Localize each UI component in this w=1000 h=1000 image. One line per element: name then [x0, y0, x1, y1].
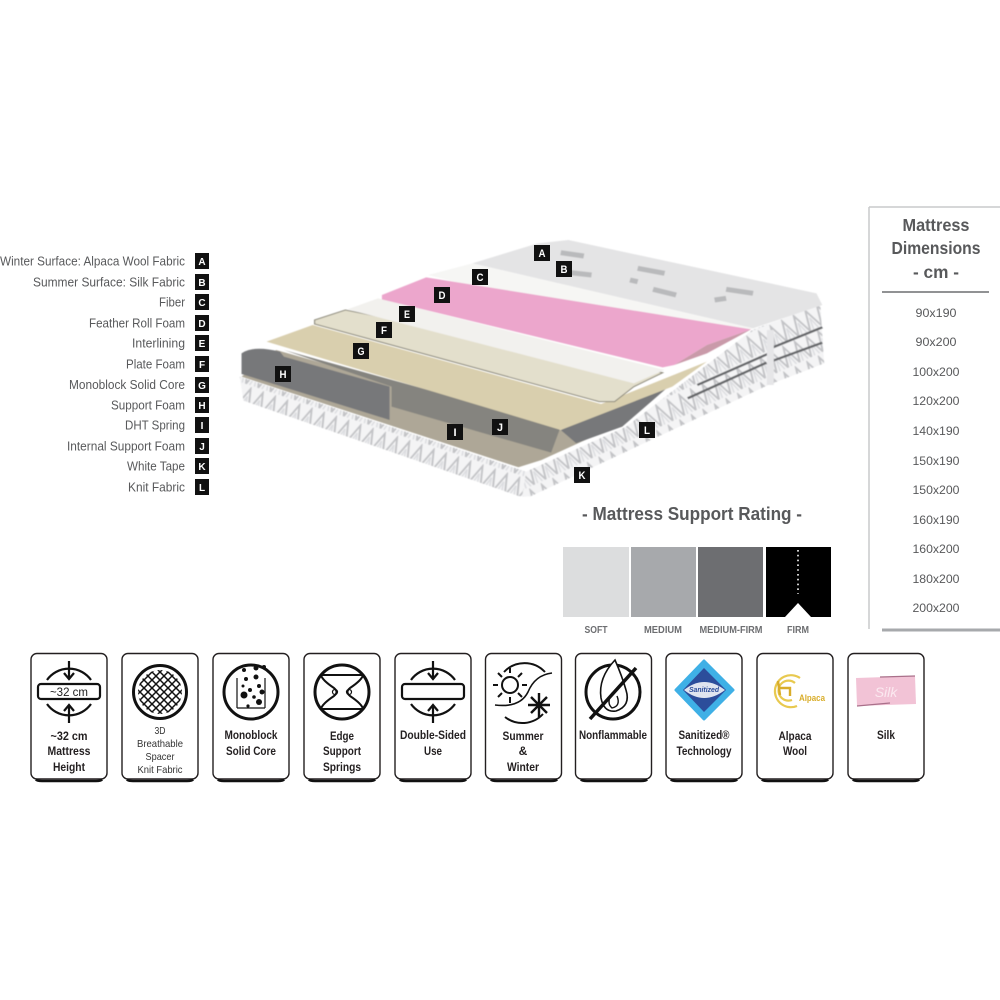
- layer badge E: E: [404, 309, 410, 321]
- card: edge support springs: [304, 654, 380, 781]
- card: mattress height: Mattress: [48, 744, 91, 758]
- legend row C: C: [198, 298, 206, 309]
- card: summer and winter: Winter: [507, 760, 539, 774]
- layer badge J: [492, 419, 508, 435]
- legend row C: Fiber: [159, 296, 185, 310]
- dimensions list: 90x190: [916, 306, 957, 320]
- dimensions list: 180x200: [912, 572, 960, 586]
- icon: double sided: [402, 661, 464, 723]
- card: sanitized technology: Sanitized®: [678, 728, 730, 742]
- card: 3D knit fabric: Breathable: [137, 738, 183, 750]
- card: edge support springs: Springs: [323, 760, 361, 774]
- dimensions heading: Mattress: [902, 215, 970, 235]
- card: mattress height: [31, 654, 107, 781]
- dimensions list: 150x200: [912, 483, 960, 497]
- icon: silk logo: Silk: [875, 684, 898, 700]
- swatch soft: [563, 547, 629, 636]
- legend row G: Monoblock Solid Core: [69, 378, 185, 392]
- legend row E: E: [199, 339, 206, 350]
- legend: mattress layers: [0, 253, 209, 495]
- card: 3D knit fabric: [122, 654, 198, 781]
- dimensions list: 200x200: [912, 601, 960, 615]
- icon: no flame: [586, 660, 640, 719]
- card: mattress height: ~32 cm: [50, 729, 88, 743]
- card: 3D knit fabric: 3D: [154, 725, 166, 737]
- card: double-sided use: Double-Sided: [400, 728, 466, 742]
- dimensions list: [912, 306, 960, 615]
- dimensions heading: Dimensions: [892, 238, 981, 258]
- legend row J: Internal Support Foam: [67, 440, 185, 454]
- layer badge L: [639, 422, 655, 438]
- legend row K: K: [198, 462, 206, 473]
- legend row H: Support Foam: [111, 398, 185, 412]
- heading: mattress support rating: - Mattress Support Rating -: [582, 504, 802, 524]
- card: silk: [848, 654, 924, 781]
- legend row E: Interlining: [132, 336, 185, 350]
- card: monoblock solid core: Solid Core: [226, 744, 276, 758]
- card: 3D knit fabric: Knit Fabric: [138, 764, 182, 776]
- icon: core with bubbles: [224, 665, 278, 719]
- layer badge I: I: [453, 427, 457, 439]
- layer badge G: [353, 343, 369, 359]
- layer badge A: A: [538, 248, 546, 260]
- layer badge D: [434, 287, 450, 303]
- layer badge G: G: [358, 346, 364, 358]
- card: summer and winter: [486, 654, 562, 781]
- legend row F: [126, 356, 209, 372]
- swatch soft: SOFT: [584, 624, 608, 636]
- dimensions list: 120x200: [912, 394, 960, 408]
- icon: sun and snowflake: [493, 663, 552, 723]
- swatch firm: FIRM: [787, 624, 809, 636]
- icon: knit mesh: [134, 666, 186, 718]
- support foam block: [242, 349, 390, 420]
- dimensions list: 100x200: [912, 365, 960, 379]
- legend row I: [125, 417, 209, 433]
- legend row L: L: [199, 483, 205, 494]
- swatch medium: MEDIUM: [644, 624, 682, 636]
- legend row E: [132, 335, 209, 351]
- feather roll foam layer: [382, 277, 751, 367]
- layer badge H: H: [280, 369, 287, 381]
- monoblock layer: [267, 325, 707, 430]
- internal support foam core: [284, 350, 561, 453]
- layer badge D: D: [438, 290, 446, 302]
- card: sanitized technology: Technology: [676, 744, 732, 758]
- interlining layer: [347, 298, 665, 383]
- card: summer and winter: &: [519, 744, 528, 758]
- card: alpaca wool: Wool: [783, 744, 807, 758]
- layer badge H: [275, 366, 291, 382]
- card: double-sided use: Use: [424, 744, 442, 758]
- mattress layer badges: [275, 245, 655, 483]
- legend row H: H: [198, 401, 206, 412]
- layer badge J: J: [497, 422, 503, 434]
- card: alpaca wool: [757, 654, 833, 781]
- layer badge E: [399, 306, 415, 322]
- layer badge F: F: [381, 325, 387, 337]
- dimensions list: 160x200: [912, 542, 960, 556]
- layer badge L: L: [644, 425, 650, 437]
- layer badge I: [447, 424, 463, 440]
- icon: alpaca logo: Alpaca: [799, 693, 826, 703]
- legend row I: DHT Spring: [125, 418, 185, 432]
- card: edge support springs: Support: [323, 744, 361, 758]
- card: sanitized technology: [666, 654, 742, 781]
- card: 3D knit fabric: Spacer: [146, 751, 175, 763]
- card: edge support springs: Edge: [330, 729, 354, 743]
- legend row D: Feather Roll Foam: [89, 316, 185, 330]
- card: nonflammable: [576, 654, 652, 781]
- swatch medium: [631, 547, 696, 636]
- legend row A: A: [198, 257, 206, 268]
- card: monoblock solid core: [213, 654, 289, 781]
- swatch medium-firm: [698, 547, 763, 636]
- card: monoblock solid core: Monoblock: [224, 728, 278, 742]
- layer badge B: B: [560, 264, 568, 276]
- layer badge A: [534, 245, 550, 261]
- legend row K: [127, 458, 209, 474]
- icon: spring: [315, 665, 369, 719]
- panel: feature icons: [31, 654, 924, 781]
- legend row L: [128, 479, 209, 495]
- icon: sanitized badge: Sanitized: [689, 685, 719, 694]
- dimensions list: 140x190: [912, 424, 960, 438]
- legend row K: White Tape: [127, 460, 185, 474]
- dimensions list: 160x190: [912, 513, 960, 527]
- layer badge C: C: [476, 272, 484, 284]
- legend row C: [159, 294, 209, 310]
- legend row L: Knit Fabric: [128, 480, 185, 494]
- legend row F: F: [199, 360, 205, 371]
- legend row B: Summer Surface: Silk Fabric: [33, 276, 185, 290]
- right side foam: [561, 370, 688, 443]
- dimensions list: 150x190: [912, 454, 960, 468]
- card: alpaca wool: Alpaca: [778, 729, 812, 743]
- mattress cutaway illustration: [240, 240, 824, 497]
- base inner surface: [242, 350, 615, 467]
- legend row A: Winter Surface: Alpaca Wool Fabric: [0, 254, 185, 268]
- plate foam layer: [315, 310, 663, 402]
- legend row F: Plate Foam: [126, 358, 185, 372]
- swatch medium-firm: MEDIUM-FIRM: [700, 624, 763, 636]
- panel: mattress dimensions: [869, 207, 1000, 630]
- layer badge F: [376, 322, 392, 338]
- legend row J: J: [199, 442, 205, 453]
- layer badge C: [472, 269, 488, 285]
- card: mattress height: Height: [53, 760, 85, 774]
- dimensions list: 90x200: [916, 335, 957, 349]
- top quilted surface: [472, 240, 822, 328]
- layer badge K: [574, 467, 590, 483]
- layer badge B: [556, 261, 572, 277]
- panel: support rating swatches: [563, 547, 831, 636]
- card: nonflammable: Nonflammable: [579, 728, 647, 742]
- icon: height: ~32 cm: [50, 687, 88, 699]
- legend row I: I: [201, 421, 204, 432]
- fiber layer: [428, 263, 753, 345]
- card: summer and winter: Summer: [502, 729, 544, 743]
- legend row D: D: [198, 319, 206, 330]
- legend row B: B: [198, 278, 206, 289]
- swatch firm: [766, 547, 831, 636]
- dimensions heading: - cm -: [913, 262, 959, 282]
- dimensions heading: [892, 215, 981, 282]
- layer badge K: K: [578, 470, 586, 482]
- card: silk: Silk: [877, 728, 895, 742]
- legend row G: G: [198, 381, 206, 392]
- card: double-sided use: [395, 654, 471, 781]
- knit fabric side panels: [240, 305, 824, 497]
